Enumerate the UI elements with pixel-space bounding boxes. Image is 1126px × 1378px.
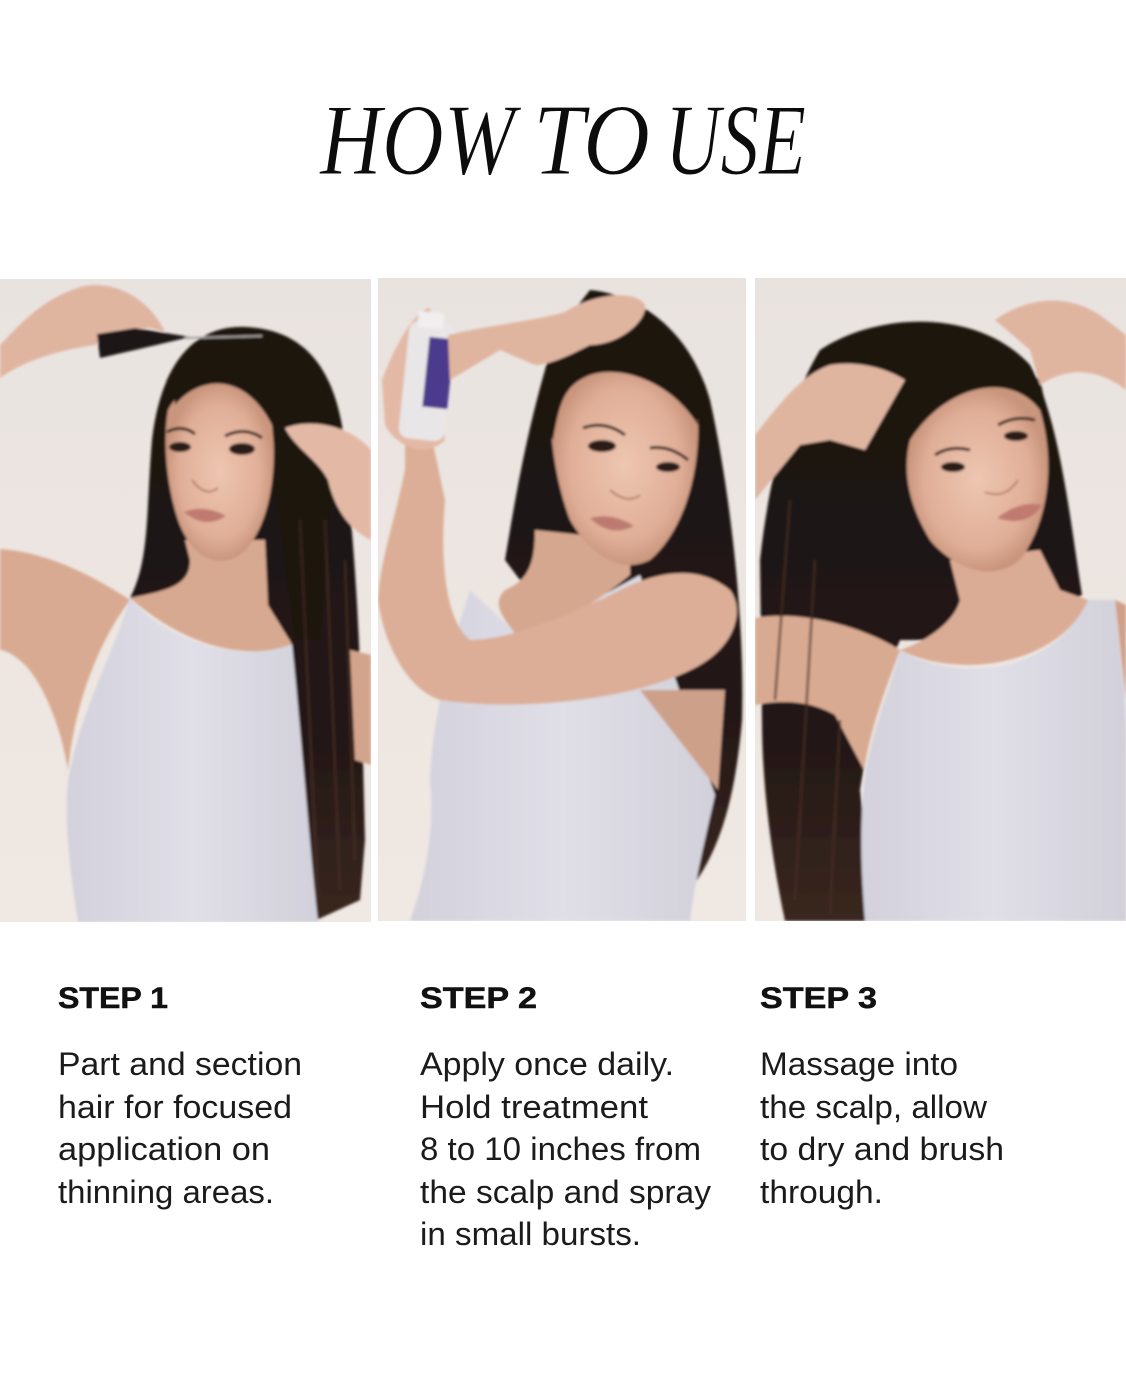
raised arm (0, 285, 165, 378)
left raised arm and hand (755, 364, 905, 500)
body: step 1: application on (58, 1131, 270, 1167)
heading: step 1: STEP 1 (58, 982, 168, 1015)
shoulder (755, 616, 900, 770)
heading: step 2: STEP 2 (420, 982, 537, 1015)
body: step 1: thinning areas. (58, 1174, 274, 1210)
text block: step 3 (760, 982, 1004, 1210)
hair back (760, 322, 1082, 921)
title: TO (533, 84, 650, 197)
body: step 3 (760, 1046, 1004, 1210)
body: step 2: in small bursts. (420, 1216, 641, 1252)
left arm and shoulder (0, 549, 130, 770)
body: step 2 (420, 1046, 711, 1252)
title (318, 84, 806, 197)
face (907, 387, 1048, 571)
top (410, 575, 715, 921)
body: step 1: Part and section (58, 1046, 302, 1082)
body: step 1 (58, 1046, 302, 1210)
heading: step 3: STEP 3 (760, 982, 877, 1015)
right raised hand (995, 301, 1126, 390)
title: HOW (318, 84, 522, 197)
far shoulder shadow (640, 690, 725, 790)
hair back (130, 327, 365, 922)
hairline (541, 361, 701, 440)
top (861, 600, 1126, 921)
text block: step 1 (58, 982, 302, 1210)
raised arm (378, 420, 737, 705)
title: USE (665, 84, 806, 197)
neck and chest (130, 540, 292, 651)
hairline (1034, 376, 1058, 471)
eyes brows mouth (941, 462, 965, 472)
hair back (505, 290, 742, 890)
text block: step 2 (420, 982, 711, 1252)
panel: step 3 photo (755, 278, 1126, 921)
body: step 3: Massage into (760, 1046, 958, 1082)
neck (499, 530, 630, 640)
body: step 3: through. (760, 1174, 883, 1210)
body: step 3: to dry and brush (760, 1131, 1004, 1167)
spray can (398, 311, 456, 442)
panel: step 1 photo (0, 279, 371, 922)
body: step 3: the scalp, allow (760, 1089, 988, 1125)
body: step 1: hair for focused (58, 1089, 292, 1125)
body: step 2: Apply once daily. (420, 1046, 674, 1082)
eyes brows mouth (588, 440, 616, 452)
panel: step 2 photo (378, 278, 746, 921)
right hand (285, 424, 371, 540)
body: step 2: the scalp and spray (420, 1174, 711, 1210)
comb (97, 328, 190, 358)
hand holding can (382, 308, 445, 449)
second arm to head (448, 295, 645, 380)
neck and chest (900, 550, 1088, 665)
eyes brows mouth (169, 442, 191, 452)
face (551, 364, 698, 565)
body: step 2: 8 to 10 inches from (420, 1131, 701, 1167)
body: step 2: Hold treatment (420, 1089, 648, 1125)
hair strands (775, 500, 840, 915)
far shoulder (350, 650, 371, 765)
hair front lock (173, 380, 332, 640)
top (67, 598, 318, 922)
hair strands (300, 520, 355, 900)
face (166, 383, 274, 561)
